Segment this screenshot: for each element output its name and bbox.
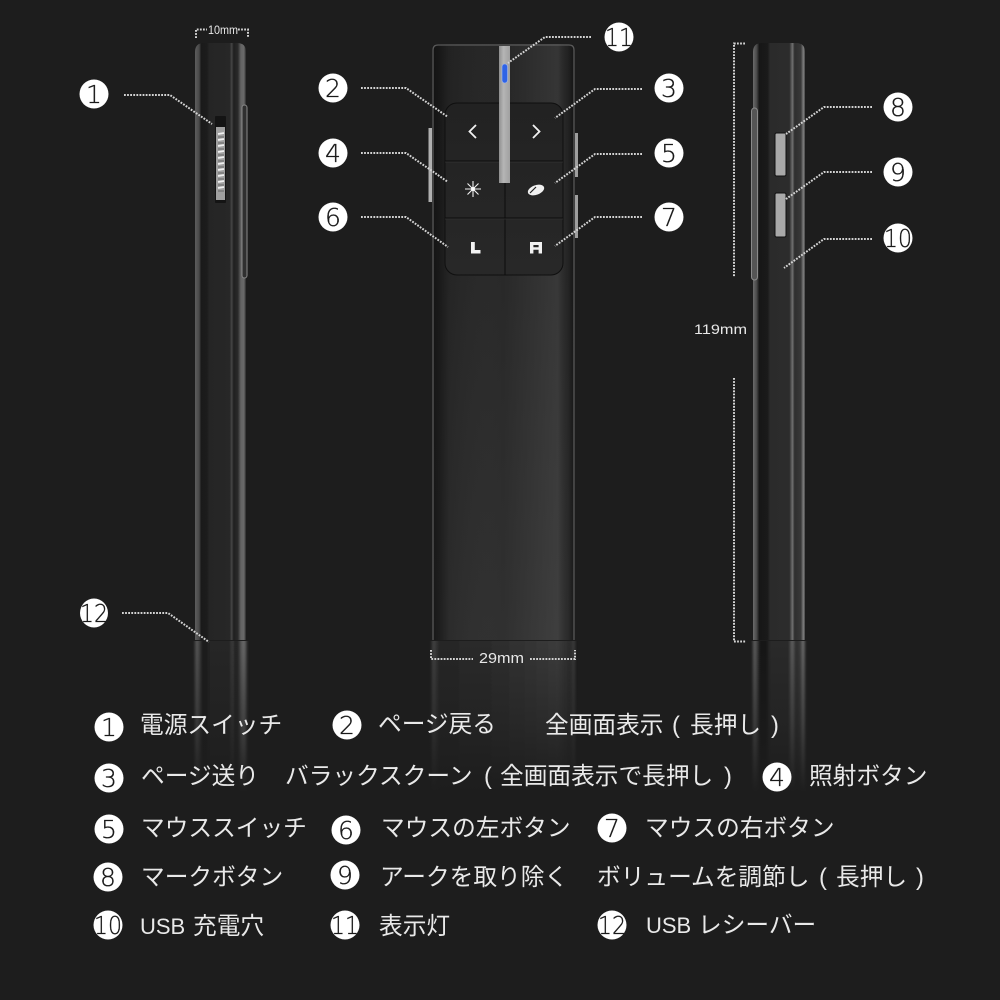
light bar — [499, 46, 510, 183]
callout number markers: 7 — [661, 203, 677, 232]
legend row 2: ) — [724, 764, 732, 790]
callout number markers: 10 — [884, 224, 912, 253]
legend row 5: 11 — [331, 911, 359, 940]
legend row 4: アークを取り除く — [380, 864, 568, 891]
legend row 1: 全画面表示 — [545, 712, 663, 739]
icon: forward chevron — [533, 125, 540, 138]
legend row 3: 7 — [604, 814, 620, 843]
icon: mouse — [526, 183, 546, 197]
callout number markers: 9 — [890, 158, 906, 187]
legend row 1: ( — [672, 713, 680, 739]
legend row 3: マウスの右ボタン — [645, 815, 835, 842]
legend row 4 — [94, 860, 924, 892]
dimension: 10mm: 10mm — [208, 23, 238, 37]
legend row 3: 5 — [101, 815, 117, 844]
legend row 1: 1 — [101, 713, 117, 742]
legend row 2: 3 — [101, 764, 117, 793]
legend row 5: 10 — [94, 911, 122, 940]
legend — [94, 710, 927, 940]
leader lines — [122, 37, 872, 642]
dimension: 10mm — [196, 23, 248, 38]
legend row 2: バラックスクーン — [285, 764, 473, 790]
legend row 4: 8 — [100, 863, 116, 892]
dimension: 29mm: 29mm — [479, 650, 524, 667]
callout number markers: 6 — [325, 203, 341, 232]
callout number markers: 11 — [605, 23, 633, 52]
legend row 1: 電源スイッチ — [140, 712, 282, 739]
mark button — [775, 133, 786, 176]
legend row 4: マークボタン — [141, 865, 283, 891]
callout number markers: 8 — [890, 93, 906, 122]
legend row 4: ) — [916, 865, 924, 891]
callout number markers: 4 — [325, 139, 341, 168]
legend row 5 — [94, 910, 816, 940]
callout number markers: 3 — [661, 74, 677, 103]
legend row 2: 全画面表示で長押し — [500, 763, 713, 790]
legend row 4: 9 — [337, 861, 353, 890]
callout number markers: 1 — [86, 80, 102, 109]
legend row 5: 12 — [598, 911, 626, 940]
legend row 3: マウスの左ボタン — [381, 815, 571, 842]
icon: laser — [465, 181, 481, 197]
button panel — [445, 103, 563, 275]
device: front view — [428, 44, 578, 640]
dimension: 29mm — [431, 650, 575, 667]
device reflections — [150, 640, 850, 792]
device: right side view — [752, 43, 805, 640]
legend row 5: レシーバー — [698, 913, 816, 939]
right side buttons — [574, 133, 578, 238]
legend row 5: USB — [140, 914, 185, 939]
legend row 1: 長押し — [690, 712, 761, 739]
icon: back chevron — [470, 125, 476, 138]
icon: R — [530, 242, 542, 254]
callout number markers: 12 — [80, 599, 108, 628]
legend row 2: ( — [484, 764, 492, 790]
legend row 2: ページ送り — [141, 763, 259, 790]
legend row 3 — [94, 814, 835, 845]
legend row 2: 照射ボタン — [809, 763, 927, 790]
callout number markers — [80, 22, 912, 628]
legend row 3: マウススイッチ — [141, 816, 307, 842]
icon: L — [471, 242, 480, 254]
volume button — [775, 193, 786, 237]
indicator LED — [502, 64, 508, 83]
dimension: 119mm — [694, 44, 747, 642]
device: left side view — [195, 43, 247, 640]
legend row 5: 表示灯 — [379, 913, 450, 940]
legend row 1: ページ戻る — [378, 712, 496, 738]
legend row 4: 長押し — [836, 864, 907, 891]
side slab — [752, 108, 758, 280]
dimension: 119mm: 119mm — [694, 321, 747, 337]
legend row 1: 2 — [339, 711, 355, 740]
legend row 1 — [94, 710, 779, 742]
legend row 3: 6 — [338, 816, 354, 845]
legend row 1: ) — [771, 713, 779, 739]
legend row 2: 4 — [769, 763, 785, 792]
left scroll slab — [428, 128, 432, 202]
legend row 5: USB — [646, 913, 691, 938]
legend row 5: 充電穴 — [193, 913, 264, 940]
legend row 2 — [94, 762, 927, 793]
callout number markers: 2 — [325, 74, 341, 103]
callout number markers: 5 — [661, 139, 677, 168]
legend row 4: ボリュームを調節し — [597, 864, 809, 891]
legend row 4: ( — [819, 865, 827, 891]
power switch — [215, 116, 226, 203]
